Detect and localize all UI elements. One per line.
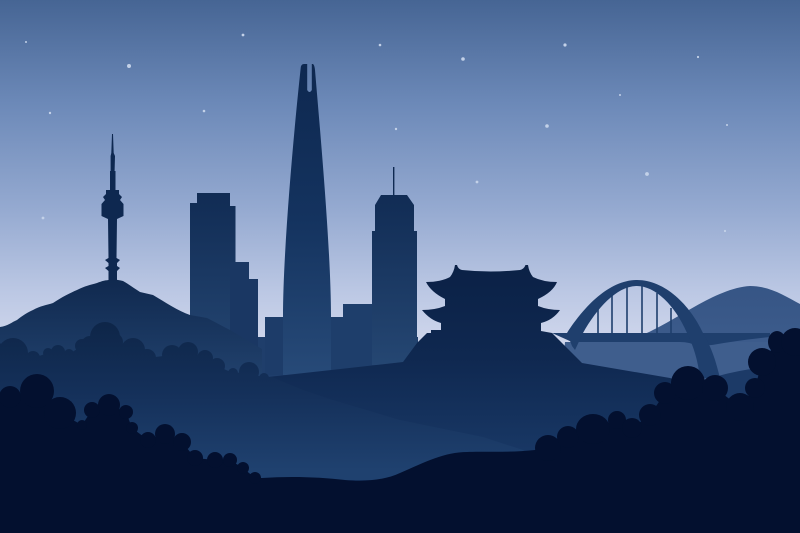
Namsan mountain bbox=[0, 280, 262, 400]
distant mountain on the right bbox=[640, 286, 800, 345]
mid-ground tree line and hill bbox=[0, 322, 560, 480]
stars bbox=[25, 34, 728, 232]
left stepped annex bbox=[230, 262, 258, 348]
river under the bridge bbox=[560, 342, 800, 400]
N Seoul Tower bbox=[102, 134, 124, 282]
palace hill and palace bbox=[260, 265, 720, 533]
foreground trees and hill bbox=[0, 328, 800, 533]
lower right hill strip bbox=[715, 368, 790, 410]
bridge bbox=[552, 280, 790, 410]
left office tower bbox=[190, 193, 236, 335]
supertall tower bbox=[283, 64, 331, 375]
low blocks right of the supertall bbox=[330, 304, 381, 375]
bridge deck bbox=[552, 333, 770, 346]
bridge hangers bbox=[598, 286, 671, 334]
low block left of the supertall bbox=[265, 317, 284, 375]
right office tower with antenna bbox=[372, 167, 417, 365]
bridge arch bbox=[567, 280, 720, 378]
low block behind skyline bbox=[258, 337, 418, 382]
